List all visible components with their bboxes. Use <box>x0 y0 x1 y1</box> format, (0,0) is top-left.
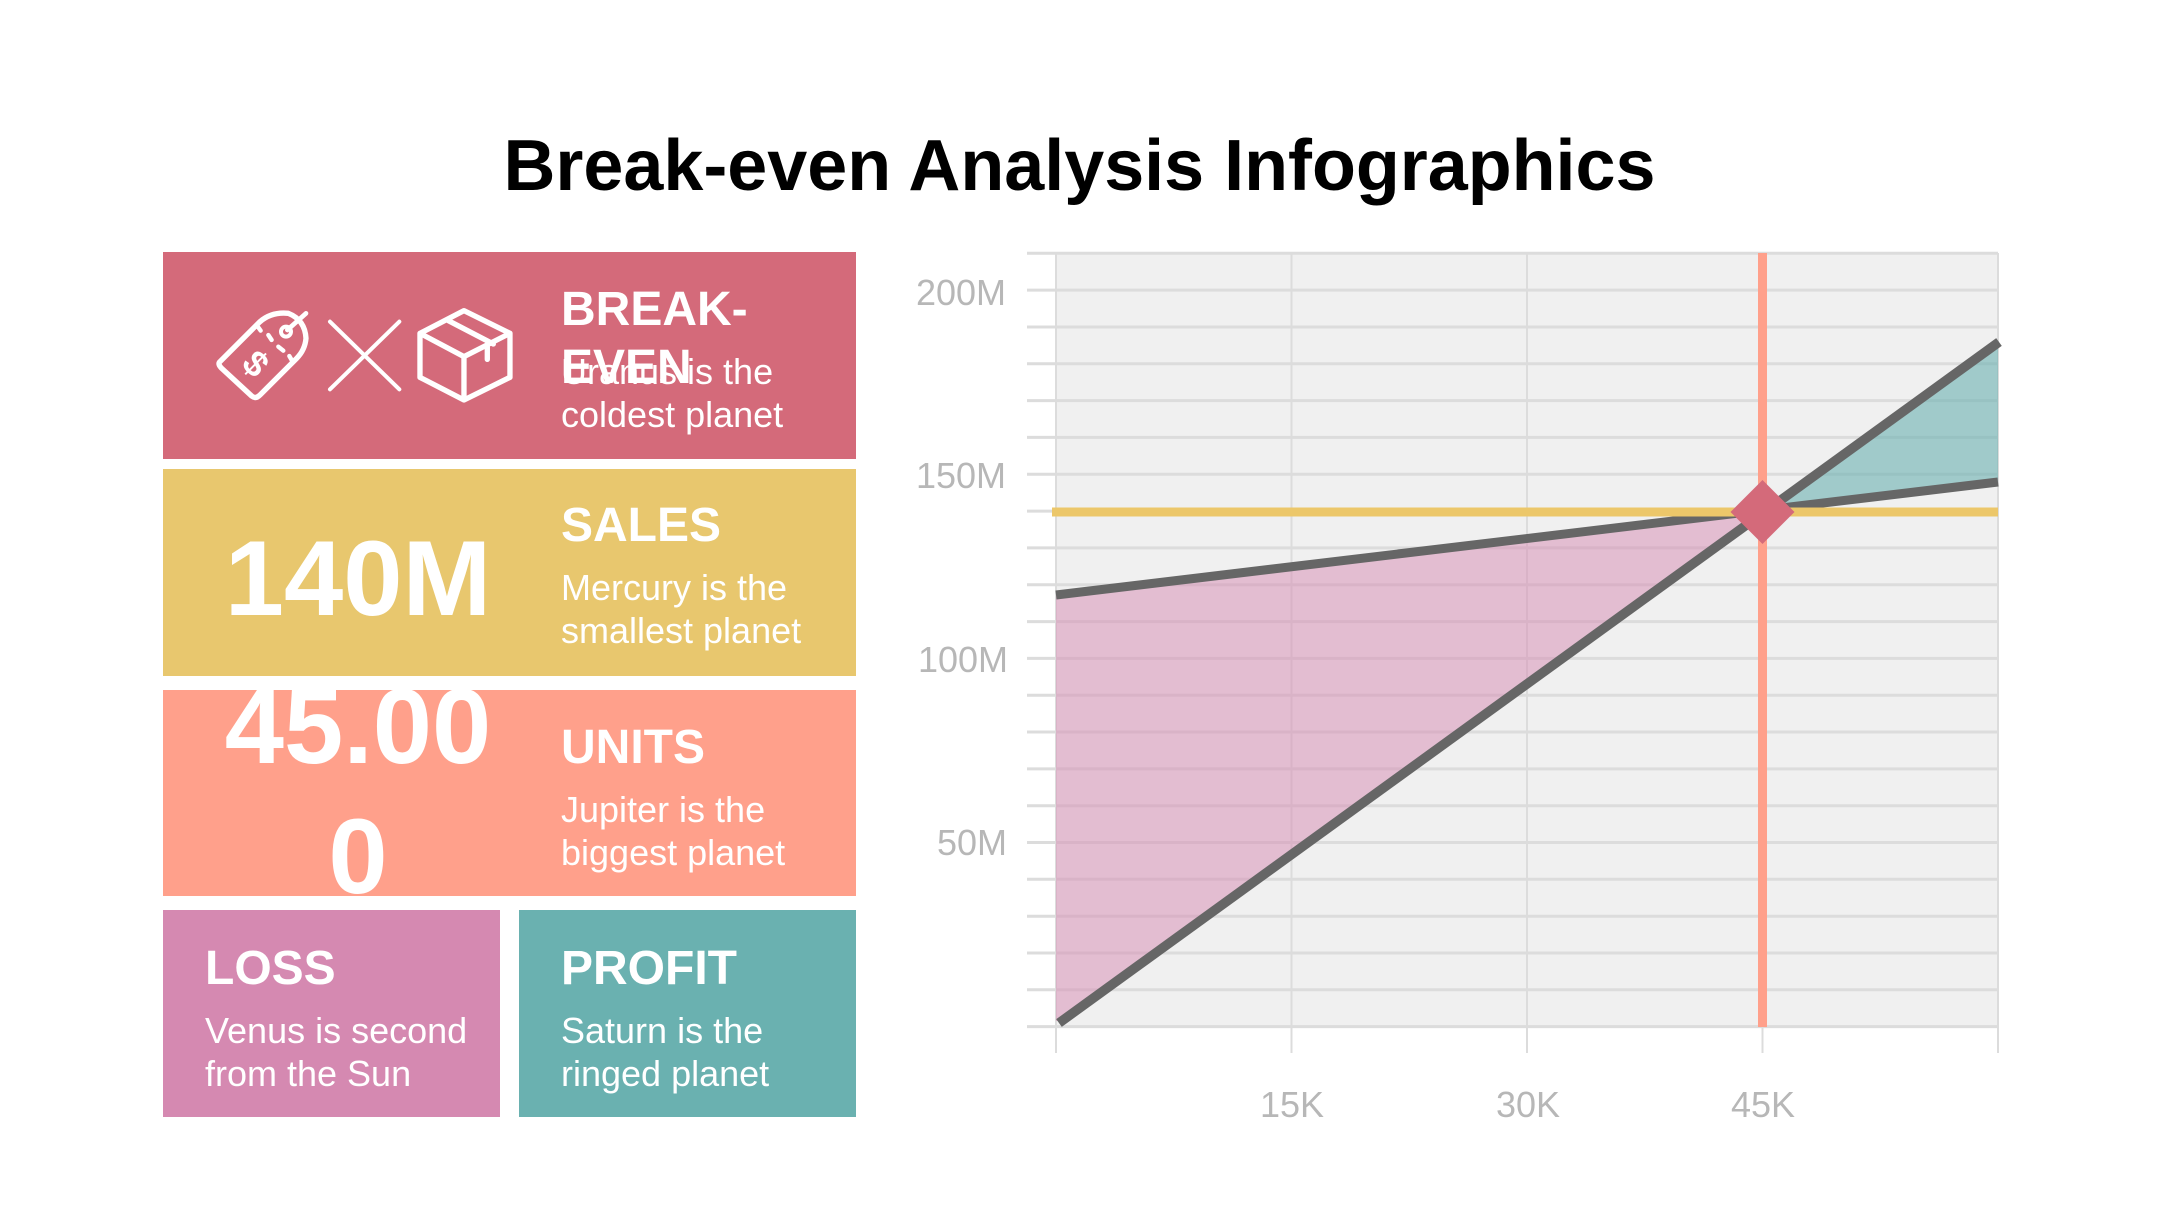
heading: profit: PROFIT <box>561 942 737 995</box>
heading: break-even: BREAK- <box>561 283 748 336</box>
text: saturn: Saturn is the <box>561 1010 763 1051</box>
x axis labels: 45K <box>1731 1084 1795 1125</box>
icon: price tag times box: $ <box>234 342 277 385</box>
line: total cost <box>1056 482 1998 595</box>
title: Break-even Analysis Infographics <box>503 126 1656 206</box>
text: saturn: ringed planet <box>561 1053 769 1094</box>
heading: loss: LOSS <box>205 942 336 995</box>
line: sales level <box>1052 508 1998 516</box>
x axis labels: 30K <box>1496 1084 1560 1125</box>
panel: sales <box>163 469 856 676</box>
area: profit <box>1762 343 1998 512</box>
text: uranus: coldest planet <box>561 394 783 435</box>
x axis labels: 15K <box>1260 1084 1324 1125</box>
panel: profit <box>519 910 856 1117</box>
text: venus: from the Sun <box>205 1053 411 1094</box>
y axis labels: 50M <box>937 822 1007 863</box>
value: 45.000 wrapped: 0 <box>328 797 388 916</box>
line: break-even units <box>1758 253 1767 1027</box>
value: 45.000 wrapped: 45.00 <box>225 667 491 786</box>
y axis labels: 100M <box>918 639 1008 680</box>
y axis labels: 150M <box>916 455 1006 496</box>
y axis labels: 200M <box>916 272 1006 313</box>
heading: units: UNITS <box>561 721 705 774</box>
text: jupiter: biggest planet <box>561 832 785 873</box>
text: venus: Venus is second <box>205 1010 467 1051</box>
text: mercury: smallest planet <box>561 610 801 651</box>
panel: break-even <box>163 252 856 459</box>
panel: units <box>163 667 856 916</box>
chart: break-even <box>916 253 1999 1125</box>
value: 140M: 140M <box>225 519 491 638</box>
text: mercury: Mercury is the <box>561 567 787 608</box>
heading: sales: SALES <box>561 499 721 552</box>
x axis labels <box>1260 1084 1795 1125</box>
heading: break-even second line: EVEN <box>561 341 692 394</box>
area: loss <box>1056 512 1762 1021</box>
marker: break-even point <box>1730 480 1794 544</box>
panel: loss <box>163 910 500 1117</box>
text: uranus: Uranus is the <box>561 351 773 392</box>
text: jupiter: Jupiter is the <box>561 789 765 830</box>
y axis labels <box>916 272 1008 863</box>
line: revenue <box>1059 342 1999 1023</box>
icon: price tag times box <box>219 311 510 400</box>
